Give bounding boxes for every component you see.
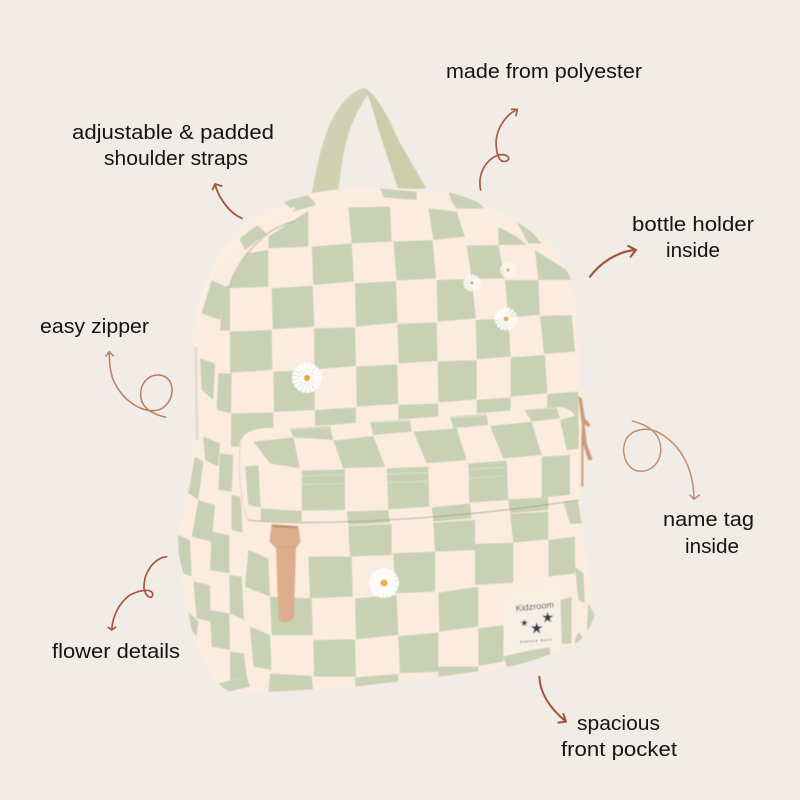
brand label patch: explore more <box>520 638 552 644</box>
daisy: large upper left <box>298 368 316 388</box>
daisy: upper cluster left <box>467 278 477 288</box>
label: easy zipper: easy zipper <box>40 316 149 338</box>
label: flower details: flower details <box>52 641 180 663</box>
label: spacious front pocket: front pocket <box>561 739 677 761</box>
daisy: upper cluster right <box>503 265 513 275</box>
arrow: front pocket <box>539 677 566 723</box>
label: shoulder straps: adjustable & padded <box>72 122 274 144</box>
label: name tag inside <box>663 509 754 558</box>
daisy: front pocket <box>374 574 394 592</box>
label: shoulder straps: shoulder straps <box>104 148 248 170</box>
top carry handle <box>312 88 426 193</box>
arrow: flower details <box>108 557 167 630</box>
backpack illustration <box>170 88 600 700</box>
label: bottle holder inside <box>632 214 754 262</box>
right zipper pull <box>578 397 593 487</box>
front pocket <box>239 407 595 693</box>
daisy: upper cluster lower <box>499 312 513 326</box>
infographic canvas <box>40 63 754 760</box>
upper zipper seam and piping <box>196 208 295 440</box>
bag body <box>170 180 600 700</box>
arrow: name tag <box>624 421 699 499</box>
arrow: shoulder straps <box>213 184 242 218</box>
upper side gusset checks <box>200 223 267 413</box>
arrow: bottle holder <box>590 246 636 277</box>
pocket seam and stitching <box>239 408 580 522</box>
arrow: easy zipper <box>106 352 172 417</box>
label: spacious front pocket <box>561 713 677 761</box>
right gusset checks <box>575 567 595 655</box>
label: name tag inside: inside <box>685 536 739 558</box>
brand label patch: Kidzroom <box>515 599 554 613</box>
label: name tag inside: name tag <box>663 509 754 531</box>
arrow: polyester <box>480 109 517 190</box>
upper panel checker pattern <box>228 188 578 447</box>
label: spacious front pocket: spacious <box>577 713 660 735</box>
left zipper pull <box>269 524 301 622</box>
brand label patch <box>503 584 562 655</box>
lower side gusset checks <box>178 437 250 692</box>
label: made from polyester: made from polyester <box>446 61 642 83</box>
label: bottle holder inside: bottle holder <box>632 214 754 236</box>
label: shoulder straps <box>72 122 274 170</box>
label: bottle holder inside: inside <box>666 240 720 262</box>
